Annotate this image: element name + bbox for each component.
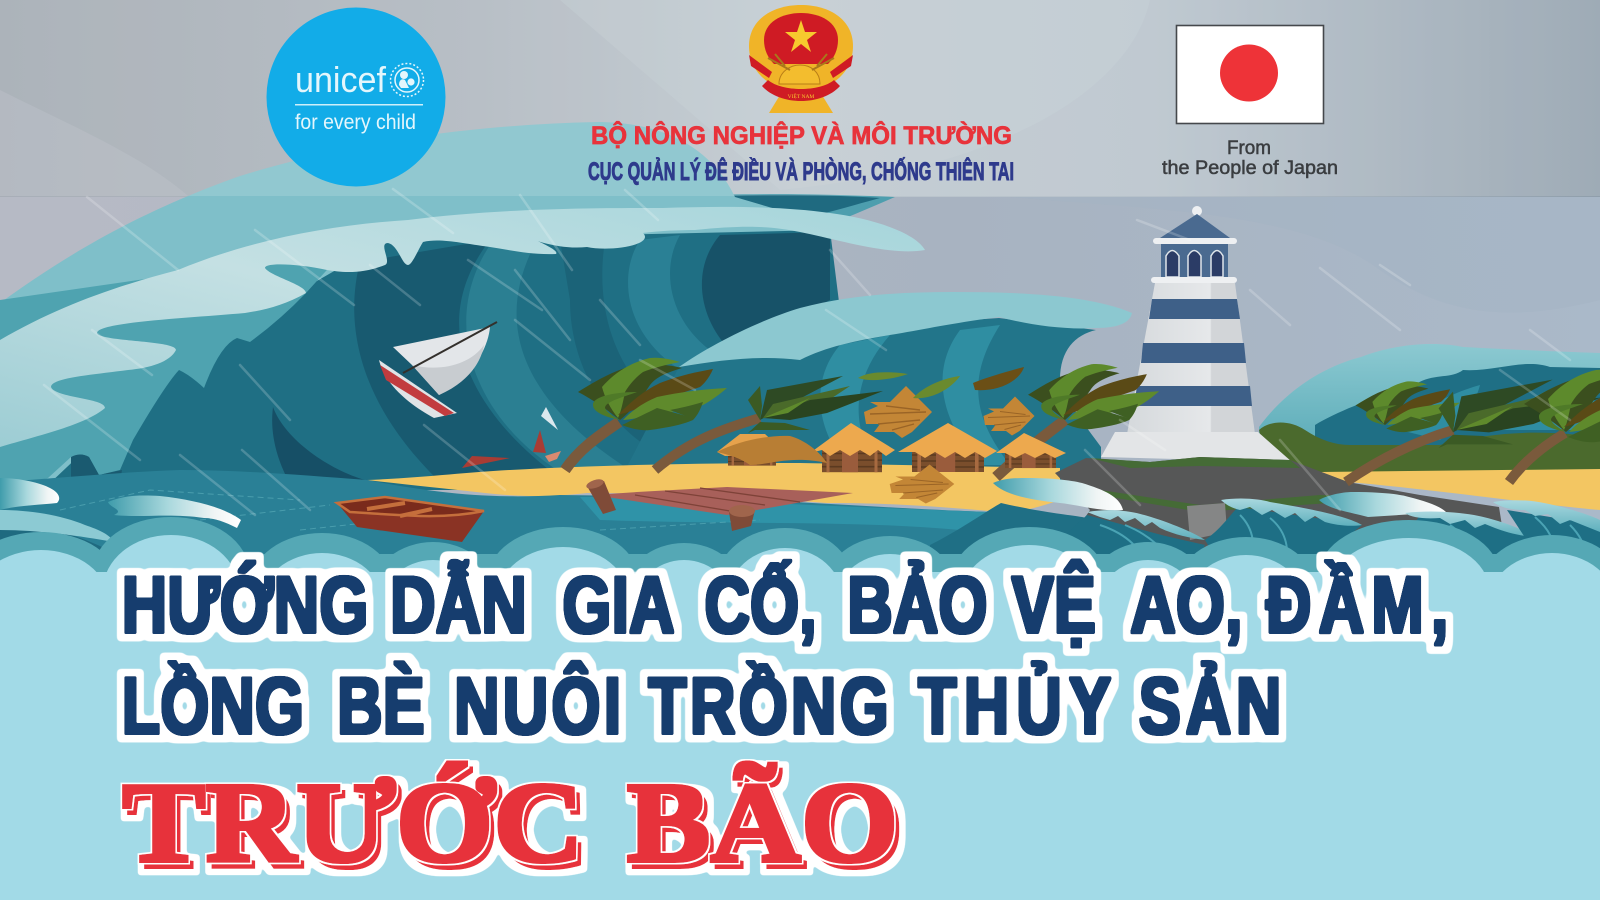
emblem of Vietnam [749, 5, 853, 113]
lighthouse base [1101, 432, 1292, 462]
Japanese flag [1176, 26, 1324, 124]
lighthouse lantern room [1161, 244, 1228, 278]
left foam 1 [0, 478, 59, 510]
interior stripes [272, 232, 830, 482]
palm 2 [655, 376, 883, 470]
second wave [620, 292, 1132, 480]
emblem gold ring [749, 5, 853, 92]
second wave body [620, 318, 1101, 480]
hull stripe [380, 365, 454, 416]
boat debris [462, 407, 561, 468]
title line 2: TRỒNG [648, 661, 892, 751]
hut 0 [717, 434, 782, 466]
flying leaves [858, 367, 1024, 398]
hut 2 [898, 423, 997, 472]
logo: UNICEF [266, 8, 446, 186]
ribbed wave F [1493, 500, 1600, 575]
hut 1 [810, 423, 895, 472]
department name: CỤC QUẢN LÝ ĐÊ ĐIỀU VÀ PHÒNG, CHỐNG THIÊN TAI [588, 156, 1014, 186]
back wave behind crest [447, 189, 895, 240]
center foam wave body [930, 503, 1205, 575]
palm trees [565, 358, 1600, 482]
hut 3 [996, 433, 1066, 468]
pier [585, 477, 853, 531]
right beach [1320, 469, 1600, 510]
unicef globe icon [390, 64, 424, 96]
sail shadow [412, 345, 484, 395]
palm 4 [1346, 380, 1600, 482]
pier post left [585, 477, 616, 514]
emblem star [785, 20, 817, 52]
palm 1 [565, 358, 727, 470]
unicef tagline: for every child [295, 111, 416, 134]
palm 3 [996, 364, 1159, 477]
emblem ribbon [762, 80, 840, 101]
title line 1: GIA [562, 560, 675, 650]
title line 2 [122, 661, 1286, 751]
lighthouse [1101, 206, 1292, 462]
background: stormy sky [0, 0, 1600, 597]
From the People of Japan: From [1227, 138, 1271, 159]
palm 5 [1509, 370, 1600, 482]
left wave cap [0, 510, 114, 542]
title line 1: HƯỚNG [122, 560, 368, 650]
emblem ribbon text: VIỆT NAM [788, 92, 814, 100]
left beach [367, 463, 1060, 512]
flying thatch pieces [717, 386, 1034, 504]
title line 2: NUÔI [454, 661, 624, 751]
center foam [993, 478, 1123, 510]
hull [379, 360, 457, 418]
rain streaks [44, 189, 1570, 515]
wave left base shadow [71, 454, 122, 482]
foreground waves [0, 478, 1600, 580]
main giant wave [0, 122, 925, 492]
sailboat [379, 322, 497, 418]
scalloped cloud panel [0, 517, 1600, 900]
title accent: TRƯỚC BÃO: TRƯỚC [122, 760, 584, 887]
second wave stripes [820, 325, 1010, 470]
title accent: TRƯỚC BÃO: BÃO [627, 760, 898, 887]
sea water [0, 470, 1100, 610]
title line 2: LỒNG [122, 661, 304, 751]
wave mid teal front [0, 250, 345, 492]
panel outer rim [0, 517, 1600, 646]
green land behind right beach [1259, 422, 1600, 480]
emblem cog [779, 65, 820, 84]
title line 1: VỆ [1012, 560, 1096, 650]
lighthouse finial [1192, 206, 1202, 216]
wave outer light layer [0, 122, 830, 490]
title line 1: AO, [1130, 560, 1243, 650]
lighthouse roof [1160, 214, 1230, 238]
From the People of Japan: the People of Japan [1162, 158, 1338, 179]
left foam 2 [108, 496, 241, 528]
title line 1: ĐẦM, [1266, 560, 1455, 650]
light header band [0, 0, 1600, 196]
emblem wheat strokes [768, 54, 834, 70]
ribbed wave B [1060, 510, 1205, 580]
From the People of Japan [1162, 138, 1338, 179]
second wave pale crest [679, 292, 1132, 367]
rocks under the lighthouse [1050, 457, 1509, 570]
wooden rowing boat [337, 497, 484, 542]
emblem red field [764, 13, 838, 64]
huts [717, 423, 1066, 472]
emblem side bands [749, 55, 853, 78]
lighthouse tower [1127, 283, 1255, 434]
wave pale crest band [0, 207, 925, 447]
title line 1: BẢO [847, 560, 987, 650]
right distant wave [1259, 344, 1600, 480]
wave dark interior [48, 230, 840, 490]
title line 1: DẪN [390, 560, 527, 650]
ministry name: BỘ NÔNG NGHIỆP VÀ MÔI TRƯỜNG [591, 120, 1012, 150]
lighthouse ledges [1151, 238, 1237, 283]
title line 2: BÈ [337, 661, 425, 751]
lighthouse blue stripes [1134, 299, 1252, 406]
sail [393, 327, 490, 395]
pier post right [729, 505, 755, 531]
ribbed wave E [1400, 512, 1535, 575]
title accent: TRƯỚC BÃO [122, 760, 898, 887]
panel light fill [0, 535, 1600, 900]
mast [403, 322, 497, 373]
title line 1: CỐ, [704, 559, 817, 650]
palm 6 [1356, 381, 1460, 432]
emblem base [769, 95, 833, 113]
left wave dark ribs [0, 522, 112, 575]
unicef wordmark: unicef [295, 59, 387, 100]
title line 2: SẢN [1139, 661, 1286, 751]
title line 1 [122, 559, 1455, 650]
right foam [1319, 492, 1446, 517]
ribbed wave C [1205, 499, 1362, 575]
title line 2: THỦY [918, 661, 1118, 751]
